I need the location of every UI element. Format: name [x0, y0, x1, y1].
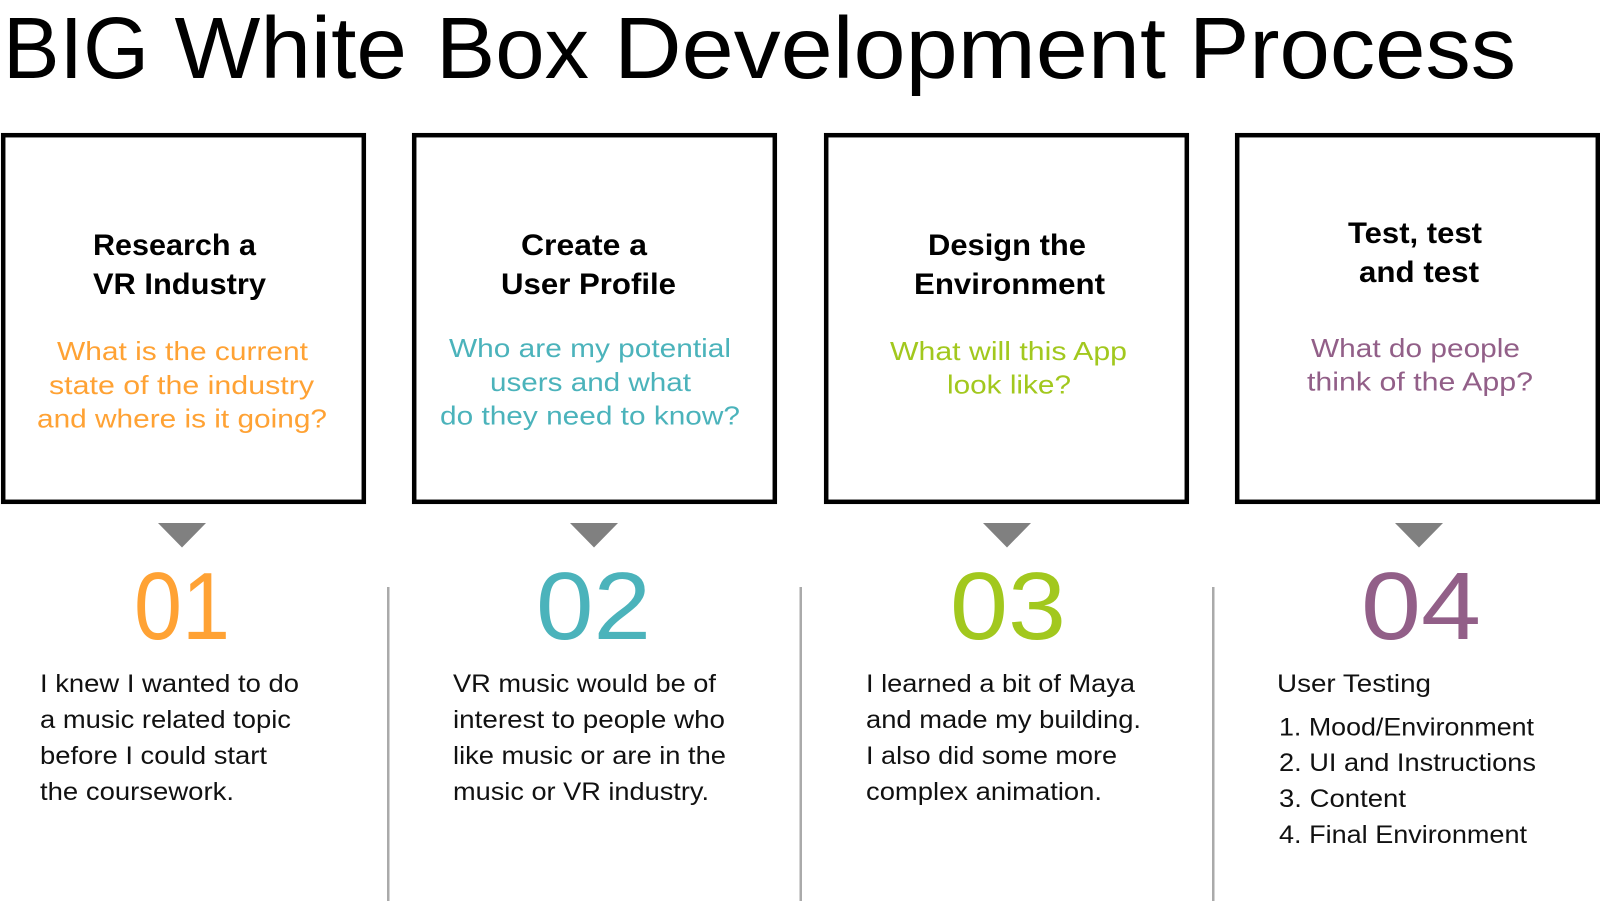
panel: step 4 box — [1237, 135, 1598, 502]
arrow: step 1 — [158, 523, 206, 548]
heading: step 2: Create a — [521, 229, 647, 262]
list: user testing rounds: 2. UI and Instructions — [1279, 749, 1536, 777]
question: step 1: state of the industry — [49, 370, 314, 400]
text block: step 2 description — [453, 670, 726, 806]
number: 03: 03 — [950, 553, 1066, 660]
question: step 4: think of the App? — [1307, 366, 1533, 396]
text block: step 2 description: VR music would be of — [453, 670, 716, 698]
title: White — [174, 0, 407, 97]
text block: step 4 description: User Testing — [1277, 670, 1431, 698]
question: step 2 — [440, 333, 740, 430]
text block: step 3 description: I also did some more — [866, 742, 1117, 770]
arrow: step 3 — [983, 523, 1031, 548]
number: 01: 01 — [134, 553, 230, 660]
question: step 3: What will this App — [890, 336, 1127, 366]
title: BIG — [3, 0, 149, 97]
panel: step 3 box — [826, 135, 1187, 502]
text block: step 1 description: a music related topic — [40, 706, 291, 734]
heading: step 1 — [93, 229, 266, 301]
heading: step 2: User Profile — [501, 268, 676, 301]
question: step 2: Who are my potential — [449, 333, 731, 363]
text block: step 1 description — [40, 670, 299, 806]
title: Development — [614, 0, 1166, 97]
heading: step 1: VR Industry — [93, 268, 266, 301]
heading: step 4: and test — [1359, 256, 1479, 289]
text block: step 3 description — [866, 670, 1141, 806]
text block: step 1 description: the coursework. — [40, 778, 234, 806]
list: user testing rounds: 1. Mood/Environment — [1279, 714, 1534, 742]
text block: step 2 description: music or VR industry. — [453, 778, 709, 806]
text block: step 3 description: and made my building. — [866, 706, 1141, 734]
arrow: step 4 — [1395, 523, 1443, 548]
text block: step 1 description: I knew I wanted to do — [40, 670, 299, 698]
question: step 3: look like? — [947, 370, 1071, 400]
question: step 4: What do people — [1311, 333, 1520, 363]
title: Box — [436, 0, 589, 97]
heading: step 3 — [914, 229, 1105, 301]
divider 2 — [800, 587, 802, 901]
heading: step 4: Test, test — [1348, 217, 1482, 250]
heading: step 4 — [1348, 217, 1482, 289]
question: step 1: and where is it going? — [37, 404, 327, 434]
heading: step 2 — [501, 229, 676, 301]
panel: step 2 box — [414, 135, 775, 502]
question: step 2: users and what — [490, 367, 692, 397]
text block: step 4 description — [1277, 670, 1536, 849]
divider 3 — [1212, 587, 1214, 901]
question: step 3 — [890, 336, 1127, 400]
title: Process — [1189, 0, 1516, 97]
number: 02: 02 — [536, 553, 651, 660]
question: step 1 — [37, 336, 327, 434]
heading: step 3: Environment — [914, 268, 1105, 301]
title — [3, 0, 1516, 97]
list: user testing rounds: 4. Final Environment — [1279, 821, 1527, 849]
question: step 4 — [1307, 333, 1533, 396]
text block: step 1 description: before I could start — [40, 742, 267, 770]
arrow: step 2 — [570, 523, 618, 548]
text block: step 2 description: like music or are in the — [453, 742, 726, 770]
heading: step 3: Design the — [928, 229, 1086, 262]
text block: step 3 description: complex animation. — [866, 778, 1102, 806]
text block: step 3 description: I learned a bit of Maya — [866, 670, 1135, 698]
panel: step 1 box — [3, 135, 364, 502]
question: step 2: do they need to know? — [440, 400, 740, 430]
divider 1 — [387, 587, 390, 901]
text block: step 2 description: interest to people who — [453, 706, 725, 734]
list: user testing rounds: 3. Content — [1279, 785, 1406, 813]
number: 04: 04 — [1361, 553, 1481, 660]
question: step 1: What is the current — [57, 336, 309, 366]
heading: step 1: Research a — [93, 229, 256, 262]
list: user testing rounds — [1279, 714, 1536, 849]
